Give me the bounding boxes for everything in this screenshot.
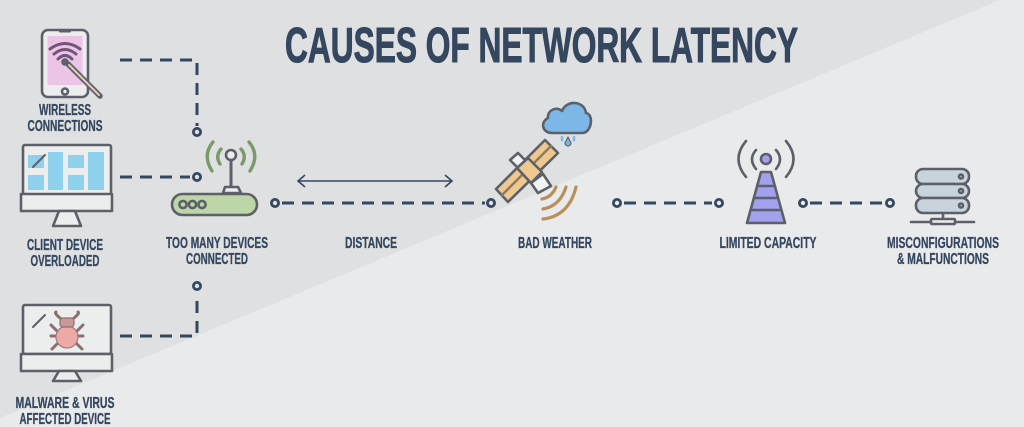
label: wireless connections: CONNECTIONS xyxy=(28,118,102,135)
label: wireless connections: WIRELESS xyxy=(39,102,91,119)
label: malware and virus affected device: MALWARE & VIRUS xyxy=(16,395,114,412)
connector: tower to server xyxy=(799,199,894,207)
icon: server stack xyxy=(911,169,974,224)
icon: tablet with wifi and stylus xyxy=(42,30,100,97)
icon: malware monitor with bug xyxy=(21,305,112,381)
connector: wireless to router xyxy=(120,60,201,136)
arrow: distance double-headed xyxy=(298,175,452,187)
label: client device overloaded: OVERLOADED xyxy=(30,253,100,270)
connector: malware device to router xyxy=(120,282,201,336)
connector: client device to router xyxy=(120,173,201,181)
icon: cell tower xyxy=(738,141,794,223)
icon: client device monitor xyxy=(21,145,112,226)
label: client device overloaded: CLIENT DEVICE xyxy=(27,237,103,254)
label: client device overloaded xyxy=(27,237,103,270)
icon: wifi router xyxy=(172,142,257,215)
label: distance: DISTANCE xyxy=(345,235,397,252)
connector: satellite to tower xyxy=(613,199,723,207)
label: misconfigurations and malfunctions xyxy=(887,235,999,268)
label: too many devices connected xyxy=(166,235,268,268)
label: too many devices connected: TOO MANY DEVICES xyxy=(166,235,268,252)
label: bad weather: BAD WEATHER xyxy=(518,235,592,252)
label: too many devices connected: CONNECTED xyxy=(186,251,248,268)
label: wireless connections xyxy=(28,102,102,135)
icon: satellite xyxy=(496,140,576,219)
label: limited capacity: LIMITED CAPACITY xyxy=(720,235,817,252)
label: malware and virus affected device xyxy=(16,395,114,427)
icon: rain cloud xyxy=(543,103,591,146)
connector: router to satellite xyxy=(271,199,495,207)
